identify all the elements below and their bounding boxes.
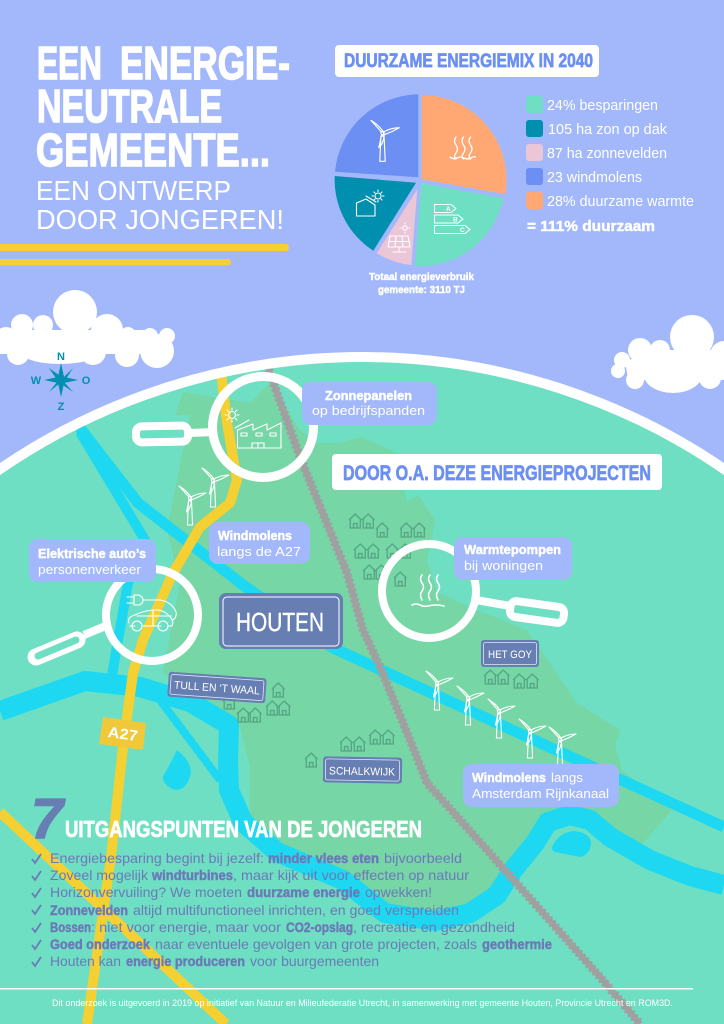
turbines along A27 [179, 468, 229, 525]
land: municipality Houten [163, 383, 672, 920]
item 1: bijvoorbeeld [384, 850, 462, 866]
item 2: , maar kijk uit voor effecten op natuur [233, 867, 469, 883]
compass: O [82, 375, 91, 387]
river: main river [0, 428, 724, 921]
callout: elektrische autos [29, 539, 156, 582]
title [36, 37, 290, 235]
compass: N [57, 351, 65, 363]
callout: warmtepompen: bij woningen [464, 558, 543, 573]
item 3: duurzame energie [247, 884, 360, 900]
lake east [552, 831, 591, 857]
callout: windmolens kanaal: langs [551, 770, 584, 785]
heading: energy mix [335, 45, 599, 77]
cloud right [611, 315, 724, 393]
item 6: geothermie [482, 936, 552, 952]
item 1: minder vlees eten [268, 850, 379, 866]
title: GEMEENTE... [36, 124, 270, 176]
legend: 105 ha zon op dak [548, 121, 667, 138]
item 5: : niet voor energie, maar voor [91, 919, 281, 935]
callout: windmolens A27 [209, 522, 310, 564]
sign: Tull en 't Waal: TULL EN ‘T WAAL [174, 680, 260, 697]
item 7 [50, 953, 379, 969]
sign: Het Goy: HET GOY [488, 649, 533, 661]
slice: zonnevelden [377, 189, 417, 265]
icon: car with plug [127, 595, 176, 631]
item 4: altijd multifunctioneel inrichten, en goed verspreiden [133, 902, 459, 918]
railway [267, 365, 640, 1024]
slice: zon op dak [335, 176, 416, 251]
sign: Schalkwijk: SCHALKWIJK [329, 765, 396, 779]
sign: Houten: HOUTEN [236, 607, 324, 637]
callout: zonnepanelen: op bedrijfspanden [312, 403, 425, 418]
item 4: Zonnevelden [50, 902, 128, 918]
compass: W [31, 375, 42, 387]
item 7: energie produceren [126, 953, 245, 969]
lake [163, 750, 191, 790]
slice: windmolens [335, 94, 418, 177]
icon: heat waves [450, 137, 476, 159]
item 2: Zoveel mogelijk [50, 867, 149, 883]
item 7: Houten kan [50, 953, 121, 969]
icon: energy label: C [460, 227, 465, 234]
title: DOOR JONGEREN! [36, 204, 284, 235]
globe map base [0, 340, 724, 1024]
footer text: Dit onderzoek is uitgevoerd in 2019 op initiatief van Natuur en Milieufederatie Utrecht, in samenwerking met gemeente Houten, Provincie Utrecht en ROM3D. [52, 998, 673, 1009]
icon: energy label: B [453, 216, 458, 224]
callout: windmolens kanaal [463, 764, 619, 807]
slice: besparingen [415, 183, 503, 266]
slice: warmte [422, 95, 506, 194]
sign: A27: A27 [107, 724, 139, 745]
callout: elektrische autos: personenverkeer [38, 562, 142, 577]
title: EEN ONTWERP [36, 175, 231, 206]
item 6 [50, 936, 552, 952]
heading: energy projects [332, 454, 662, 490]
icon: solar panel [388, 223, 410, 252]
title: EEN [37, 37, 102, 89]
magnifier: solar panels on companies [136, 376, 314, 478]
cloud left [0, 290, 175, 368]
callout: windmolens A27: Windmolens [218, 528, 292, 543]
legend: 28% duurzame warmte [547, 193, 694, 210]
pie caption [369, 271, 474, 296]
number seven: 7 [31, 787, 65, 851]
legend [526, 96, 694, 235]
heading: uitgangspunten: UITGANGSPUNTEN VAN DE JONGEREN [65, 816, 422, 842]
motorway south-west [0, 812, 226, 1024]
item 2: windturbines [151, 867, 233, 883]
item 3: opwekken! [365, 884, 432, 900]
globe white ring [0, 357, 724, 475]
sign: Schalkwijk [323, 756, 402, 784]
sign: Het Goy [481, 640, 539, 667]
legend: 87 ha zonnevelden [547, 145, 667, 162]
motorway A27 [87, 372, 237, 1024]
callout: elektrische autos: Elektrische auto’s [38, 546, 146, 561]
icon: heat waves [412, 575, 444, 606]
icon: energy label: A [446, 206, 451, 213]
sign: A27 [99, 717, 146, 750]
icon: wind turbine [371, 120, 399, 161]
magnifier: heat pumps [382, 544, 565, 638]
compass: Z [58, 401, 65, 413]
item 6: Goed onderzoek [50, 936, 150, 952]
compass [31, 351, 91, 413]
pie chart [335, 94, 506, 266]
item 5: CO2-opslag [286, 919, 353, 935]
magnifier: electric cars [36, 569, 198, 661]
icon: factory [225, 408, 281, 448]
item 5: , recreatie en gezondheid [353, 919, 515, 935]
callout: windmolens A27: langs de A27 [217, 544, 301, 559]
footer rule [0, 988, 693, 990]
callout: windmolens kanaal: Windmolens [472, 770, 546, 785]
item 3: Horizonvervuiling? We moeten [50, 884, 242, 900]
item 2 [50, 867, 469, 883]
pie caption: gemeente: 3110 TJ [378, 284, 465, 296]
sign: Houten [219, 593, 343, 649]
icon: energy label [434, 204, 470, 234]
callout: warmtepompen [454, 537, 572, 580]
sign: Tull en 't Waal [167, 672, 267, 703]
turbines along canal [426, 671, 576, 766]
item 3 [50, 884, 432, 900]
check marks [32, 854, 41, 966]
legend: = 111% duurzaam [527, 218, 655, 235]
heading: energy mix: DUURZAME ENERGIEMIX IN 2040 [344, 51, 593, 72]
item 1: Energiebesparing begint bij jezelf: [50, 850, 264, 866]
legend: 23 windmolens [547, 169, 642, 186]
callout: zonnepanelen [302, 382, 437, 425]
title: ENERGIE- [120, 37, 290, 89]
item 5 [50, 919, 515, 935]
callout: windmolens kanaal: Amsterdam Rijnkanaal [472, 786, 609, 801]
icon: house with solar roof [356, 190, 384, 216]
yellow title bars [0, 244, 289, 265]
item 5: Bossen [50, 919, 91, 935]
pie caption: Totaal energieverbruik [369, 271, 474, 283]
list of principles [32, 850, 552, 969]
callout: warmtepompen: Warmtepompen [464, 542, 561, 557]
item 7: voor buurgemeenten [250, 953, 379, 969]
callout: zonnepanelen: Zonnepanelen [325, 388, 412, 403]
item 1 [50, 850, 462, 866]
legend: 24% besparingen [547, 97, 658, 114]
title: NEUTRALE [37, 80, 222, 132]
houses [223, 514, 538, 767]
item 6: naar eventuele gevolgen van grote projecten, zoals [155, 936, 477, 952]
